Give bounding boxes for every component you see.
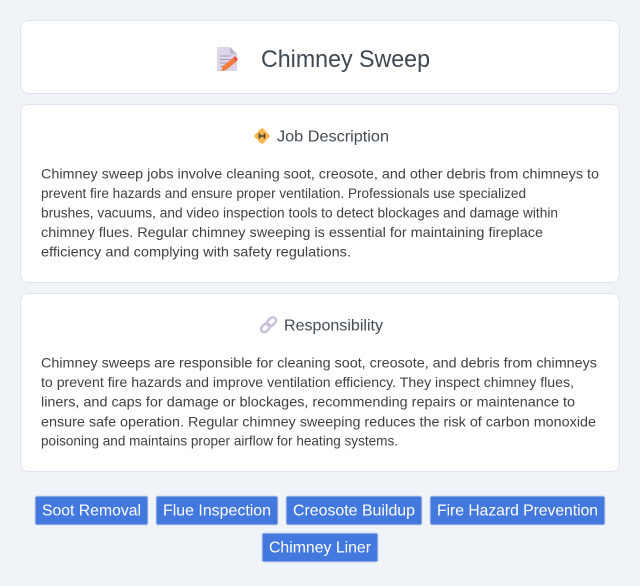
tag: Fire Hazard Prevention: Fire Hazard Prevention [437,503,598,520]
icon: chain link [260,316,277,334]
tag: Soot Removal: Soot Removal [42,503,141,520]
tag: Flue Inspection [156,496,278,525]
text block: job description [41,166,599,260]
text block: job description: efficiency and complying with safety regulations. [41,244,351,260]
tag: Creosote Buildup [286,496,422,525]
text block: job description: prevent fire hazards and ensure proper ventilation. Professionals use specialized [41,185,526,201]
tag: Creosote Buildup: Creosote Buildup [293,503,415,520]
icon: construction diamond [254,128,270,144]
text block: responsibility: poisoning and maintains proper airflow for heating systems. [41,433,398,449]
heading: job description: Job Description [277,128,389,146]
text block: responsibility: ensure safe operation. Regular chimney sweeping reduces the risk of carbon monoxide [41,414,596,430]
text block: responsibility: liners, and caps for damage or blockages, recommending repairs or maintenance to [41,394,575,410]
text block: responsibility [41,355,597,449]
text block: job description: chimney flues. Regular chimney sweeping is essential for maintaining fireplace [41,224,543,240]
tag: Flue Inspection: Flue Inspection [163,503,271,520]
panel: title [20,20,620,94]
text block: responsibility: Chimney sweeps are responsible for cleaning soot, creosote, and debris from chimneys [41,355,597,371]
tag: Fire Hazard Prevention [430,496,605,525]
tag: Chimney Liner [262,533,378,562]
heading: Chimney Sweep: Chimney Sweep [261,46,430,73]
tags [35,496,605,562]
panel: responsibility [20,294,620,472]
icon: document with pencil [217,47,238,71]
text block: job description: Chimney sweep jobs involve cleaning soot, creosote, and other debris from chimneys to [41,166,599,182]
text block: job description: brushes, vacuums, and video inspection tools to detect blockages and damage within [41,205,558,221]
tag: Chimney Liner: Chimney Liner [269,540,372,557]
heading: responsibility: Responsibility [284,318,383,334]
text block: responsibility: to prevent fire hazards and improve ventilation efficiency. They inspect chimney flues, [41,374,574,390]
tag: Soot Removal [35,496,148,525]
panel: job description [20,104,620,282]
